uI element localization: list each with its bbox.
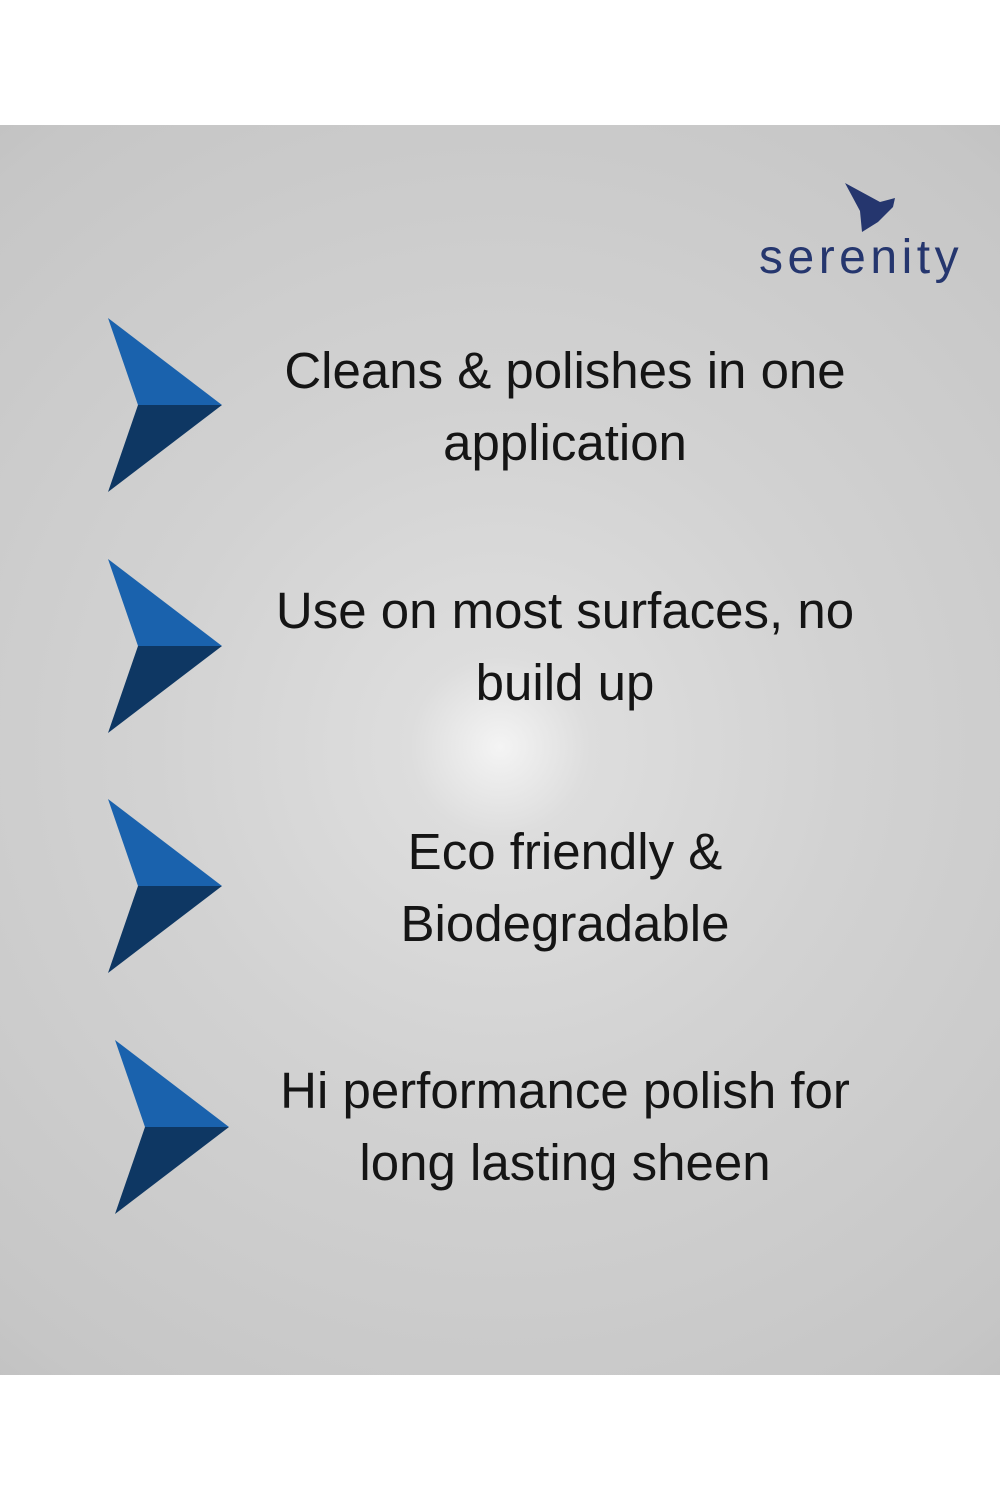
text: feature 4: Hi performance polish for xyxy=(280,1062,850,1119)
text: feature 2: Use on most surfaces, no xyxy=(276,582,854,639)
arrow 3 xyxy=(108,799,222,973)
text: feature 2 xyxy=(276,582,854,711)
text: feature 1: application xyxy=(443,414,687,471)
text: feature 3: Biodegradable xyxy=(401,895,729,952)
arrow 4 xyxy=(115,1040,229,1214)
text: feature 2: build up xyxy=(476,654,654,711)
logo: serenity xyxy=(759,183,963,284)
icon: origami bird xyxy=(845,183,895,232)
text: feature 1: Cleans & polishes in one xyxy=(284,342,846,399)
arrow 1 xyxy=(108,318,222,492)
text: feature 4: long lasting sheen xyxy=(359,1134,771,1191)
text: feature 4 xyxy=(280,1062,850,1191)
text: feature 1 xyxy=(284,342,846,471)
text: feature 3: Eco friendly & xyxy=(408,823,722,880)
brand name: serenity xyxy=(759,231,963,284)
arrow 2 xyxy=(108,559,222,733)
text: feature 3 xyxy=(401,823,729,952)
